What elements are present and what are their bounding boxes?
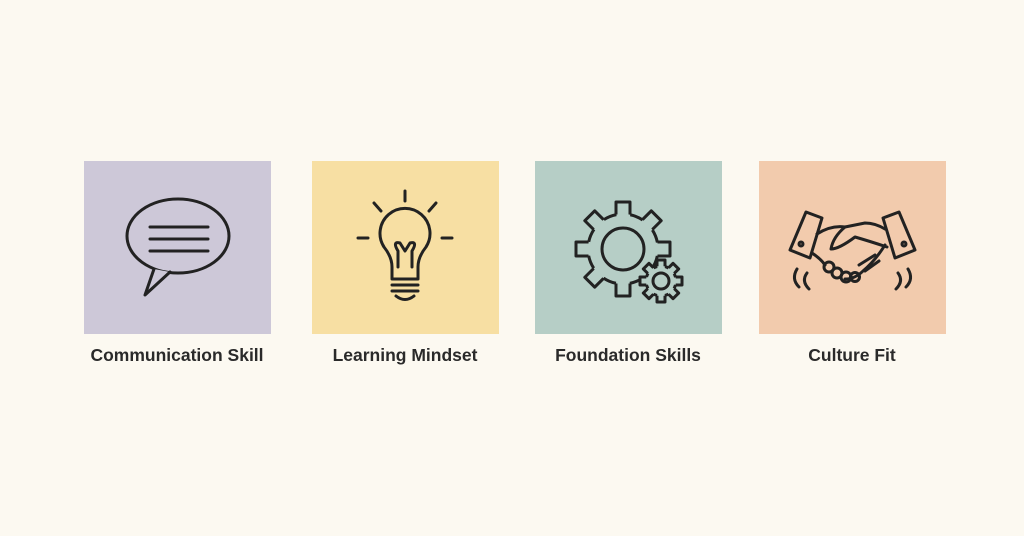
icon: gears	[574, 200, 684, 304]
label: foundation: Foundation Skills	[555, 345, 701, 365]
icon: light bulb	[356, 190, 454, 301]
icon: handshake	[788, 210, 916, 291]
panel: communication	[84, 161, 271, 334]
icon: speech bubble	[126, 198, 230, 296]
label: communication: Communication Skill	[90, 345, 264, 365]
label: learning: Learning Mindset	[333, 345, 477, 365]
label: culture: Culture Fit	[808, 345, 896, 365]
panel: foundation	[535, 161, 722, 334]
panel: culture	[759, 161, 946, 334]
panel: learning	[312, 161, 499, 334]
